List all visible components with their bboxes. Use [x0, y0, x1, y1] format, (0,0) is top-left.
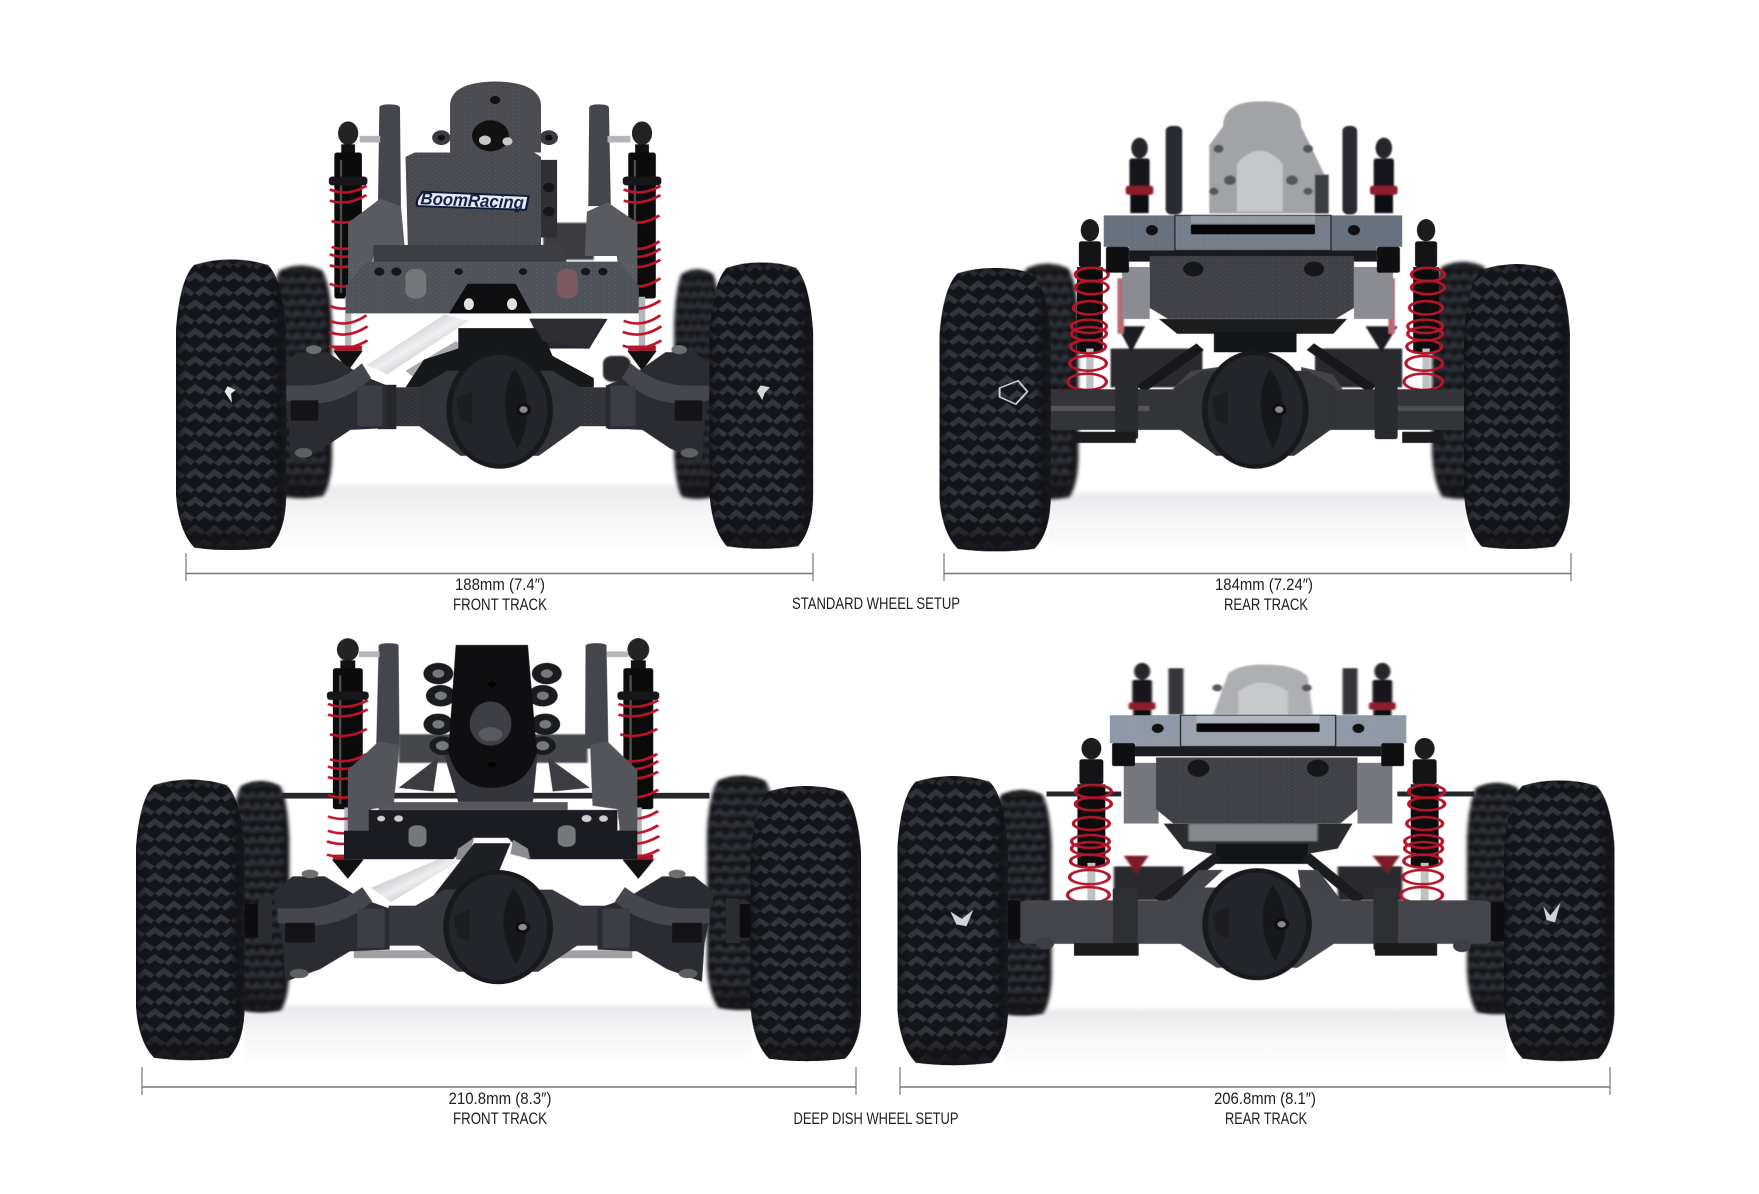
fuel tank	[1150, 256, 1354, 319]
BoomRacing logo: BoomRacing	[420, 189, 524, 213]
rear bumper	[1104, 214, 1402, 273]
axle mount and links	[1159, 844, 1360, 902]
frame towers	[378, 104, 611, 206]
steering link	[366, 314, 469, 378]
floor shadow	[272, 482, 727, 556]
background chassis	[530, 223, 631, 382]
panel: standard wheel setup rear view	[939, 101, 1570, 556]
frame arches	[348, 199, 637, 315]
chassis plate	[1047, 791, 1474, 796]
dimension: front track standard: FRONT TRACK	[453, 596, 547, 614]
panel: deep dish wheel setup front view	[136, 638, 861, 1066]
differential cover	[419, 350, 580, 469]
dimension: rear track deep dish	[900, 1067, 1610, 1128]
dimension: front track deep dish: 210.8mm (8.3″)	[448, 1090, 552, 1108]
servo box	[373, 152, 566, 263]
frame towers	[376, 643, 608, 749]
axle mount and links	[1140, 332, 1372, 389]
differential cover	[1174, 868, 1340, 980]
right tire	[1464, 264, 1570, 549]
floor shadow	[1049, 489, 1466, 556]
rear axle tube	[1019, 888, 1492, 956]
panel: deep dish wheel setup rear view	[897, 663, 1615, 1068]
rear tires	[232, 776, 776, 1013]
rear background tires	[1016, 262, 1494, 499]
dimension: rear track deep dish: 206.8mm (8.1″)	[1214, 1090, 1316, 1108]
dimension: rear track standard: 184mm (7.24″)	[1215, 576, 1313, 594]
chassis rails	[282, 734, 709, 799]
dimension: front track standard: 188mm (7.4″)	[455, 576, 545, 594]
rear axle tube	[1042, 374, 1469, 443]
front axle housing	[378, 385, 626, 429]
wheel hubs	[242, 899, 755, 943]
front bumper	[346, 262, 639, 313]
right tire	[1504, 780, 1615, 1061]
fuel tank	[1156, 757, 1358, 824]
label: standard wheel setup: STANDARD WHEEL SETUP	[792, 595, 960, 613]
dimension: rear track standard: REAR TRACK	[1224, 596, 1308, 614]
rear bumper	[1110, 714, 1406, 766]
floor shadow	[1004, 1006, 1507, 1068]
frame arches	[348, 741, 637, 834]
right front tire	[710, 262, 813, 549]
floor shadow	[244, 1002, 752, 1066]
upper frame towers	[1166, 126, 1357, 215]
steering link	[371, 838, 530, 902]
lower frame	[1122, 267, 1393, 334]
differential cover	[415, 870, 581, 984]
differential cover	[1175, 350, 1336, 469]
knuckles	[279, 345, 714, 461]
far shocks	[1126, 138, 1398, 213]
dimension: rear track standard	[944, 553, 1571, 614]
far shocks	[1129, 663, 1396, 725]
near shocks	[1068, 738, 1445, 903]
shock cross bolts	[360, 136, 631, 142]
upper frame towers	[1168, 668, 1358, 715]
dimension: front track deep dish: FRONT TRACK	[453, 1110, 547, 1128]
axle housing	[389, 906, 610, 946]
crossmember	[344, 802, 637, 859]
front shocks	[329, 121, 661, 371]
dimension: front track standard	[186, 553, 813, 614]
rear background tires	[992, 783, 1527, 1016]
left tire	[897, 776, 1008, 1065]
knuckles	[273, 870, 714, 982]
far suspension	[1111, 278, 1402, 387]
wheel hubs	[1003, 900, 1508, 941]
lower frame	[1124, 763, 1392, 854]
dimension: rear track deep dish: REAR TRACK	[1225, 1110, 1307, 1128]
dimension: front track deep dish	[142, 1067, 856, 1128]
near shocks	[1068, 219, 1444, 390]
axle mount	[406, 319, 603, 387]
rear tires	[270, 266, 720, 499]
left tire	[939, 268, 1051, 551]
label: deep dish wheel setup: DEEP DISH WHEEL SETUP	[794, 1110, 958, 1128]
transfer case	[432, 81, 558, 152]
transmission	[1209, 101, 1329, 214]
transmission	[1212, 665, 1313, 715]
tie rod	[354, 950, 632, 958]
left front tire	[176, 259, 286, 550]
panel: standard wheel setup front view	[176, 81, 813, 556]
front shocks	[327, 638, 659, 879]
transfer case	[399, 645, 590, 802]
far suspension	[1114, 856, 1402, 900]
left tire	[136, 780, 245, 1060]
right tire	[751, 786, 861, 1061]
shock cross bolts	[359, 651, 628, 657]
